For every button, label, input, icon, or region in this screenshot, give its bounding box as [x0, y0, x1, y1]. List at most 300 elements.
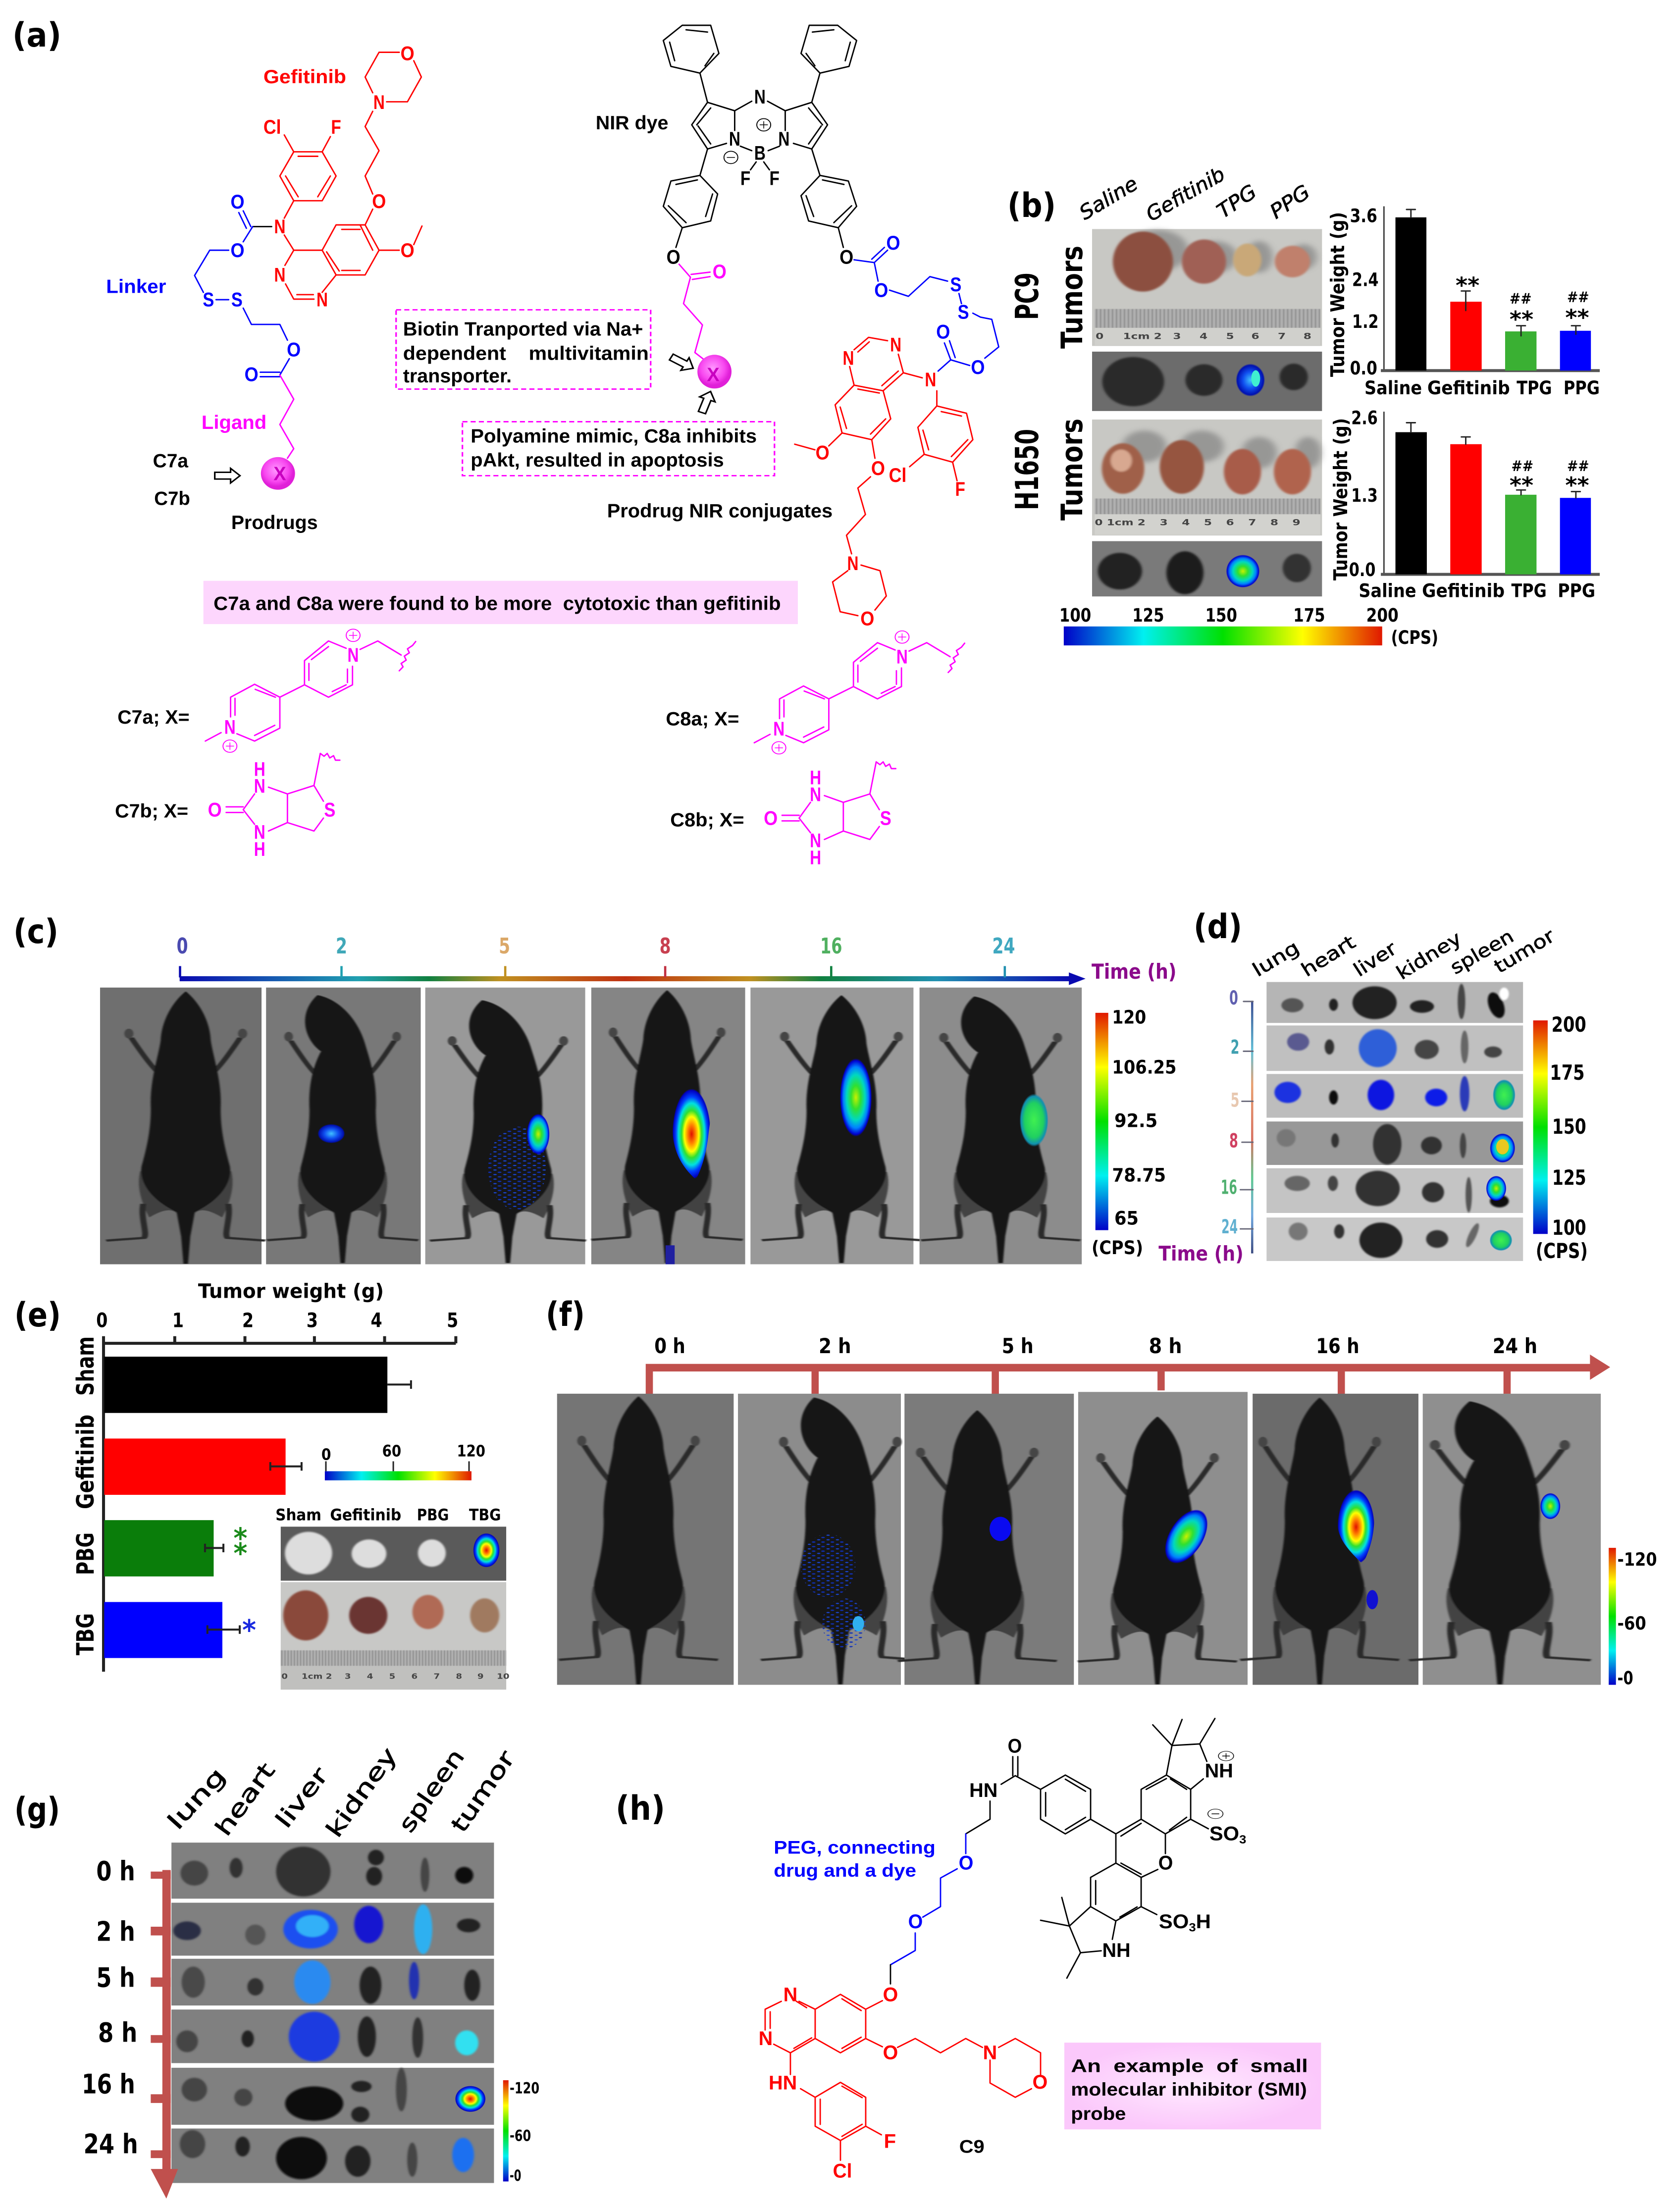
time axis: 2 [1231, 1036, 1239, 1058]
label: Linker: Linker [106, 276, 166, 297]
mouse image: 5 h [898, 1394, 1074, 1685]
organ header: lung: lung [1249, 936, 1303, 981]
color bar: 0 to 120: -0 [1618, 1667, 1633, 1688]
tumor photo inset: 4 [367, 1672, 373, 1681]
molecule: NIR dye conjugate: F [740, 167, 750, 189]
fluorescence image: PC9 tumors [1092, 352, 1322, 411]
horizontal bar chart: 0 [96, 1309, 107, 1332]
molecule: dye part of C9: SO [1209, 1823, 1255, 1844]
molecule: gefitinib part of NIR conjugate: O [871, 458, 885, 479]
mouse image: 24 h [1409, 1394, 1601, 1685]
ligand ball X: X [273, 463, 286, 484]
panel label (c): (c) [13, 912, 58, 951]
color bar: 0 to 120: -60 [510, 2127, 531, 2145]
molecule: NIR dye conjugate: S [950, 273, 961, 295]
time labels: 24 h [84, 2128, 138, 2160]
color bar: 0 to 120 [321, 1442, 485, 1480]
molecule: gefitinib part of C9: N [759, 2028, 773, 2050]
inset labels [275, 1506, 501, 1525]
timeline arrow with hour ticks: 0 [177, 934, 188, 959]
mouse image: 16 h [750, 988, 921, 1264]
photo: H1650 excised tumors: 0 1cm 2 [1095, 518, 1146, 527]
structure: C8b biotin: O [764, 807, 778, 829]
color bar: 100 to 200 CPS: (CPS) [1536, 1239, 1588, 1263]
bar chart: H1650 tumor weight: 0.0 [1349, 559, 1375, 580]
timeline arrow with hour ticks: 2 [336, 934, 347, 959]
timeline red arrow [646, 1355, 1610, 1394]
text: 92.5 [1114, 1110, 1157, 1131]
time labels: 8 h [1149, 1334, 1182, 1359]
axis title: Tumor weight: Tumor weight (g) [198, 1279, 384, 1303]
structure: C7b biotin: O [208, 799, 222, 821]
organ row: 16 h [171, 2068, 494, 2125]
bar chart: PC9 tumor weight: PPG [1564, 377, 1600, 399]
molecule: NIR dye conjugate: O [874, 279, 888, 301]
bar chart: PC9 tumor weight: ** [1456, 272, 1479, 298]
molecule: gefitinib part of NIR conjugate: Cl [889, 464, 906, 486]
category label: Gefitinib: Gefitinib [72, 1415, 100, 1509]
color bar: 0 to 120: -120 [510, 2079, 539, 2098]
time axis: 24 [1221, 1215, 1238, 1238]
timeline arrow with hour ticks [177, 934, 1086, 985]
structure: C8a bipyridinium: N [896, 646, 908, 668]
photo: H1650 excised tumors: 3 [1160, 518, 1168, 527]
organ header: heart: heart [209, 1758, 280, 1841]
molecule: gefitinib prodrug with linker and ligand [195, 43, 422, 490]
organ row: 5 h [171, 1959, 494, 2005]
callout: biotin transport: transporter. [403, 365, 512, 386]
molecule: gefitinib prodrug with linker and ligand: S [203, 289, 214, 311]
color bar: 100 to 200 CPS: 175 [1550, 1061, 1585, 1085]
molecule: gefitinib part of NIR conjugate: N [847, 552, 858, 575]
time labels [654, 1334, 1537, 1359]
organ header: kidney: kidney [1392, 927, 1466, 984]
photo: H1650 excised tumors: 7 [1248, 518, 1256, 527]
molecule: NIR dye conjugate: N [778, 128, 789, 150]
structure: C7b biotin: S [324, 799, 335, 821]
callout: biotin transport: Biotin Tranported via Na+ [403, 318, 643, 340]
molecule: NIR dye conjugate: O [667, 246, 680, 268]
organ header: lung: lung [162, 1762, 231, 1835]
arrow: hollow arrow pointing at X [667, 351, 697, 374]
molecule: gefitinib part of C9: O [883, 2042, 898, 2063]
panel: ex vivo organ imaging (g) [82, 1843, 539, 2199]
photo: PC9 excised tumors: 0 [1096, 331, 1103, 341]
callout: pink cytotoxicity band: C7a and C8a were found to be more cytotoxic than gefitinib [213, 593, 781, 614]
bar chart: PC9 tumor weight: 0.0 [1350, 357, 1377, 379]
text: 78.75 [1112, 1164, 1166, 1186]
panel label (g): (g) [14, 1791, 60, 1830]
color bar: 65 to 120 CPS: 65 [1114, 1208, 1139, 1229]
text: Time (h) [1092, 960, 1176, 984]
molecule: gefitinib prodrug with linker and ligand: O [231, 239, 245, 261]
tumor photo inset: 10 [497, 1672, 510, 1681]
category label: Sham: Sham [72, 1336, 100, 1396]
photo: H1650 excised tumors: 6 [1226, 518, 1234, 527]
tumor photo inset [281, 1582, 510, 1689]
time labels: 5 h [1002, 1334, 1034, 1359]
time labels: 5 h [96, 1962, 135, 1993]
callout: polyamine mimic [463, 421, 775, 475]
molecule: gefitinib prodrug with linker and ligand: N [274, 264, 286, 286]
mouse image: 16 h [1240, 1394, 1418, 1685]
time labels: 0 h [654, 1334, 685, 1359]
axis title: Tumor Weight bottom chart: Tumor Weight (g) [1330, 418, 1352, 580]
panel: whole-body imaging over time (f) [557, 1334, 1657, 1688]
bar chart: PC9 tumor weight: ** [1510, 307, 1533, 332]
callout: SMI probe: An example of small [1071, 2056, 1308, 2076]
color bar: 100 to 200 CPS: 200 [1552, 1013, 1586, 1037]
color bar: 100 to 200 CPS [1059, 605, 1438, 648]
bar chart: PC9 tumor weight: 2.4 [1352, 269, 1379, 290]
label: Ligand: Ligand [202, 412, 266, 433]
color bar: 100 to 200 CPS: 175 [1293, 605, 1325, 626]
molecule: dye part of C9: 3 [1239, 1833, 1246, 1846]
panel: tumor images and charts (b) [1059, 205, 1600, 648]
molecule: gefitinib prodrug with linker and ligand: S [231, 289, 243, 311]
callout: polyamine mimic: Polyamine mimic, C8a inhibits [471, 425, 757, 447]
label: PEG connecting drug and dye [774, 1837, 936, 1881]
molecule: gefitinib part of NIR conjugate: F [955, 478, 965, 500]
callout: pink cytotoxicity band [204, 581, 798, 624]
organ header: heart: heart [1297, 931, 1360, 981]
panel label (e): (e) [14, 1296, 61, 1335]
organ row: 0 h [1266, 982, 1523, 1023]
photo: PC9 excised tumors: 8 [1304, 331, 1311, 341]
molecule: dye part of C9: 3 [1189, 1921, 1196, 1934]
tumor photo inset: 6 [412, 1672, 418, 1681]
horizontal bar chart: 1 [172, 1309, 184, 1332]
horizontal bar chart: 4 [371, 1309, 382, 1332]
structure: C7b biotin: N [254, 821, 265, 843]
color bar: 0 to 120 [503, 2079, 539, 2185]
time axis: 16 [1221, 1176, 1237, 1199]
inset labels: Sham [275, 1506, 321, 1525]
organ row: 8 h [1266, 1121, 1523, 1165]
structure: C7b biotin: N [254, 775, 265, 797]
structure: C8a bipyridinium [754, 631, 965, 754]
label: C8b X=: C8b; X= [670, 809, 744, 831]
color bar: 100 to 200 CPS: 100 [1059, 605, 1091, 626]
panel label (d): (d) [1194, 907, 1242, 947]
structure: C8b biotin: H [810, 767, 821, 789]
structure: C7b biotin [208, 753, 340, 860]
photo: H1650 excised tumors: 5 [1204, 518, 1212, 527]
panel: whole-body imaging over time (f): 24 h [1493, 1334, 1537, 1359]
structure: C7b biotin: H [254, 838, 265, 860]
callout: SMI probe: probe [1071, 2104, 1126, 2124]
photo: PC9 excised tumors: 7 [1278, 331, 1286, 341]
bar chart: H1650 tumor weight: 1.3 [1351, 484, 1378, 506]
bar chart: PC9 tumor weight: 3.6 [1350, 205, 1377, 226]
panel: ex vivo organ imaging (d) [1158, 982, 1588, 1265]
bar chart: H1650 tumor weight: ** [1510, 473, 1533, 498]
label: C7a: C7a [153, 450, 189, 472]
label: Time (h): Time (h) [1158, 1242, 1244, 1265]
molecule: dye part of C9: SO [1159, 1911, 1204, 1933]
molecule: gefitinib prodrug with linker and ligand: O [401, 239, 415, 261]
tumor photo inset: 7 [433, 1672, 440, 1681]
organ row: 24 h [171, 2128, 494, 2183]
bar chart: H1650 tumor weight: 2.6 [1351, 407, 1378, 429]
molecule: dye part of C9: H [1196, 1911, 1211, 1933]
tumor photo inset: 9 [477, 1672, 484, 1681]
label: C7b: C7b [154, 488, 190, 509]
label: Gefitinib: Gefitinib [263, 66, 346, 87]
organ row: 2 h [1266, 1025, 1523, 1071]
structure: C8b biotin: S [880, 807, 891, 829]
column header: Saline: Saline [1075, 172, 1142, 225]
label: C8a X=: C8a; X= [666, 708, 739, 730]
callout: SMI probe: molecular inhibitor (SMI) [1071, 2079, 1307, 2100]
bar chart: H1650 tumor weight: Saline [1359, 580, 1416, 602]
column header: PPG: PPG [1266, 181, 1314, 223]
text: 106.25 [1112, 1056, 1176, 1078]
bar chart: H1650 tumor weight: TPG [1511, 580, 1547, 602]
photo: H1650 excised tumors: 4 [1182, 518, 1190, 527]
molecule: dye part of C9: NH [1102, 1939, 1131, 1961]
molecule: gefitinib part of NIR conjugate: O [860, 608, 874, 630]
mouse image: 2 h [738, 1394, 920, 1685]
structure: C8a bipyridinium: N [773, 718, 785, 739]
molecule: NIR dye conjugate: F [770, 167, 780, 189]
timeline arrow with hour ticks: 8 [660, 934, 671, 959]
label: C7b X=: C7b; X= [115, 800, 188, 822]
bar chart: H1650 tumor weight [1349, 407, 1600, 602]
panel label (b): (b) [1007, 186, 1056, 225]
time axis [1221, 987, 1254, 1254]
bar chart: H1650 tumor weight: PPG [1558, 580, 1595, 602]
horizontal bar chart: 2 [242, 1309, 254, 1332]
color bar: 100 to 200 CPS: 125 [1132, 605, 1164, 626]
molecule: dye part of C9: O [908, 1911, 923, 1933]
horizontal bar chart: * [233, 1522, 247, 1555]
molecule: gefitinib prodrug with linker and ligand: O [401, 43, 415, 64]
mouse image: 0 h [557, 1394, 733, 1685]
row label: Tumors top: Tumors [1055, 246, 1090, 349]
organ header: spleen: spleen [393, 1744, 470, 1837]
time labels: 2 h [819, 1334, 851, 1359]
molecule: dye part of C9: HN [969, 1780, 997, 1801]
inset labels: Gefitinib [330, 1506, 401, 1525]
color bar: 65 to 120 CPS [1092, 1006, 1176, 1259]
label: PEG connecting drug and dye: PEG, connecting [774, 1837, 936, 1858]
photo: PC9 excised tumors: 3 [1173, 331, 1181, 341]
photo: H1650 excised tumors [1092, 420, 1322, 535]
bar chart: PC9 tumor weight: ## [1567, 289, 1589, 306]
mouse image: 2 h [266, 988, 420, 1264]
mouse image: 0 h [100, 988, 265, 1264]
organ header: liver: liver [1350, 937, 1401, 981]
structure: C7b biotin: H [254, 758, 265, 780]
molecule: NIR dye conjugate: N [754, 86, 766, 107]
color bar: 100 to 200 CPS [1533, 1013, 1588, 1263]
color bar: 0 to 120 [1609, 1548, 1657, 1688]
organ row: 24 h [1266, 1217, 1523, 1261]
molecule: NIR dye conjugate: O [839, 246, 853, 268]
label: Prodrugs: Prodrugs [231, 512, 318, 533]
label: C7a X=: C7a; X= [117, 706, 190, 728]
photo: H1650 excised tumors: 9 [1292, 518, 1301, 527]
time labels [82, 1855, 138, 2160]
bar chart: PC9 tumor weight: TPG [1517, 377, 1552, 399]
label: PEG connecting drug and dye: drug and a dye [774, 1860, 916, 1881]
mouse image: 24 h [920, 988, 1082, 1264]
photo: PC9 excised tumors: 4 [1200, 331, 1207, 341]
time labels: 16 h [1316, 1334, 1360, 1359]
fluorescence inset [281, 1527, 506, 1580]
photo: PC9 excised tumors [1092, 229, 1322, 346]
tumor photo inset: 8 [456, 1672, 462, 1681]
molecule: gefitinib prodrug with linker and ligand: O [245, 364, 259, 385]
timeline arrow with hour ticks: 24 [993, 934, 1015, 959]
column header: Gefitinib: Gefitinib [1142, 163, 1229, 226]
molecule: gefitinib part of C9: O [883, 1984, 898, 2006]
molecule: NIR dye conjugate: O [887, 232, 900, 254]
time axis: 5 [1231, 1089, 1239, 1111]
mouse image: 8 h [1078, 1392, 1248, 1685]
panel label (h): (h) [616, 1789, 665, 1828]
molecule: gefitinib prodrug with linker and ligand: Cl [263, 116, 281, 138]
organ header: liver: liver [270, 1762, 333, 1833]
molecule: gefitinib part of C9 [759, 1984, 1047, 2182]
category label: TBG: TBG [72, 1613, 100, 1655]
time axis: 0 [1229, 987, 1238, 1009]
molecule: gefitinib part of C9: F [884, 2130, 896, 2152]
bar chart: PC9 tumor weight: ## [1510, 291, 1532, 307]
molecule: gefitinib prodrug with linker and ligand: O [287, 339, 301, 361]
structure: C7a bipyridinium: N [348, 644, 359, 666]
photo: PC9 excised tumors: 5 [1226, 331, 1234, 341]
molecule: gefitinib part of NIR conjugate: O [816, 442, 830, 464]
time labels: 0 h [96, 1855, 135, 1887]
color bar: 100 to 200 CPS: 200 [1366, 605, 1399, 626]
molecule: dye part of C9: O [959, 1852, 973, 1874]
callout: SMI probe [1064, 2043, 1321, 2129]
tumor photo inset: 1cm 2 [302, 1672, 332, 1681]
category label: PBG: PBG [72, 1532, 100, 1575]
color bar: 0 to 120: 0 [321, 1446, 331, 1464]
molecule: dye part of C9: O [1158, 1852, 1173, 1874]
bar chart: PC9 tumor weight [1350, 205, 1600, 399]
molecule: gefitinib part of C9: HN [769, 2072, 797, 2094]
ligand ball X: X [707, 364, 720, 385]
molecule: gefitinib prodrug with linker and ligand: N [373, 92, 385, 113]
color bar: 100 to 200 CPS: 150 [1552, 1115, 1586, 1139]
photo: H1650 excised tumors: 8 [1270, 518, 1278, 527]
callout: biotin transport [396, 310, 651, 389]
organ row: 5 h [1266, 1074, 1523, 1118]
molecule: gefitinib part of NIR conjugate: N [925, 369, 936, 390]
arrow: hollow arrow to X [215, 469, 240, 483]
molecule: NIR dye conjugate: O [971, 356, 985, 378]
timeline arrow with hour ticks: 5 [499, 934, 510, 959]
structure: C8b biotin: N [810, 830, 821, 851]
structure: C8b biotin [764, 762, 896, 868]
time labels: 8 h [98, 2017, 137, 2049]
organ row: 0 h [171, 1843, 494, 1898]
organ header: tumor: tumor [1490, 925, 1559, 978]
horizontal bar chart: 3 [307, 1309, 318, 1332]
inset labels: TBG [469, 1506, 501, 1525]
bar chart: PC9 tumor weight: 1.2 [1352, 311, 1379, 332]
time axis: 8 [1229, 1130, 1238, 1152]
inset labels: PBG [417, 1506, 449, 1525]
column header: TPG: TPG [1213, 180, 1261, 223]
molecule: NIR dye conjugate: B [754, 142, 766, 164]
color bar: 100 to 200 CPS: 150 [1205, 605, 1237, 626]
color bar: 100 to 200 CPS: 100 [1552, 1216, 1586, 1240]
organ row: 2 h [171, 1903, 494, 1955]
structure: C7a bipyridinium: N [224, 716, 236, 738]
bar chart: H1650 tumor weight: ** [1565, 473, 1589, 498]
ligand ball X [261, 457, 295, 490]
label: C9: C9 [959, 2137, 985, 2157]
horizontal bar chart: * [233, 1537, 247, 1570]
molecule: gefitinib prodrug with linker and ligand: O [231, 191, 245, 213]
molecule: gefitinib part of C9: N [784, 1984, 797, 2006]
molecule: gefitinib prodrug with linker and ligand: F [331, 116, 341, 138]
row label: PC9: PC9 [1009, 272, 1046, 320]
molecule: NIR dye conjugate: S [958, 301, 969, 323]
molecule: NIR dye conjugate: O [713, 261, 727, 282]
time labels: 16 h [82, 2068, 135, 2100]
bar chart: H1650 tumor weight: ## [1567, 458, 1589, 474]
photo: PC9 excised tumors: 1cm 2 [1123, 331, 1162, 341]
horizontal bar chart [96, 1309, 458, 1672]
fluorescence image: H1650 tumors [1092, 541, 1322, 596]
molecule: NIR dye conjugate: O [936, 321, 950, 343]
mouse image: 8 h [591, 988, 745, 1264]
molecule: gefitinib prodrug with linker and ligand: N [274, 215, 286, 238]
molecule: gefitinib part of C9: Cl [833, 2160, 852, 2182]
row label: H1650: H1650 [1009, 429, 1046, 510]
color bar: 0 to 120: 60 [382, 1442, 401, 1461]
tumor photo inset: 0 [281, 1672, 288, 1681]
panel: whole-body imaging over time (c) [100, 934, 1176, 1264]
molecule: dye part of C9 [890, 1719, 1246, 1984]
color bar: 100 to 200 CPS: (CPS) [1391, 627, 1438, 648]
organ row: 8 h [171, 2009, 494, 2063]
arrow: hollow arrow pointing up at X [694, 389, 718, 415]
ligand ball X [697, 355, 732, 388]
timeline arrow with hour ticks: 16 [820, 934, 842, 959]
molecule: gefitinib prodrug with linker and ligand: O [372, 190, 386, 212]
axis title: Tumor Weight top chart: Tumor Weight (g) [1327, 212, 1349, 377]
tumor photo inset: 3 [345, 1672, 351, 1681]
molecule: gefitinib part of NIR conjugate: N [843, 347, 854, 369]
color bar: 0 to 120: 120 [457, 1442, 485, 1461]
label: Prodrug NIR conjugates: Prodrug NIR conjugates [607, 500, 833, 522]
bar chart: PC9 tumor weight: Saline [1364, 377, 1422, 399]
molecule: gefitinib part of NIR conjugate: N [890, 334, 901, 356]
tumor photo inset: 5 [389, 1672, 395, 1681]
organ header: tumor: tumor [446, 1745, 520, 1837]
molecule: gefitinib part of C9: O [1033, 2071, 1047, 2093]
panel: tumor weight chart and images (e) [96, 1279, 510, 1689]
panel: SMI probe C9 (h) [759, 1719, 1321, 2182]
molecule: dye part of C9: O [1008, 1735, 1022, 1757]
panel label (f): (f) [546, 1295, 585, 1334]
mouse image: 5 h [425, 988, 586, 1264]
time labels: 2 h [96, 1916, 135, 1947]
molecule: NIR dye conjugate [663, 25, 999, 415]
vertical red time arrow [151, 1870, 178, 2199]
horizontal bar chart: * [242, 1614, 256, 1647]
label: NIR dye: NIR dye [596, 112, 668, 134]
molecule: gefitinib prodrug with linker and ligand: N [316, 289, 328, 311]
organ header: kidney: kidney [320, 1742, 402, 1842]
